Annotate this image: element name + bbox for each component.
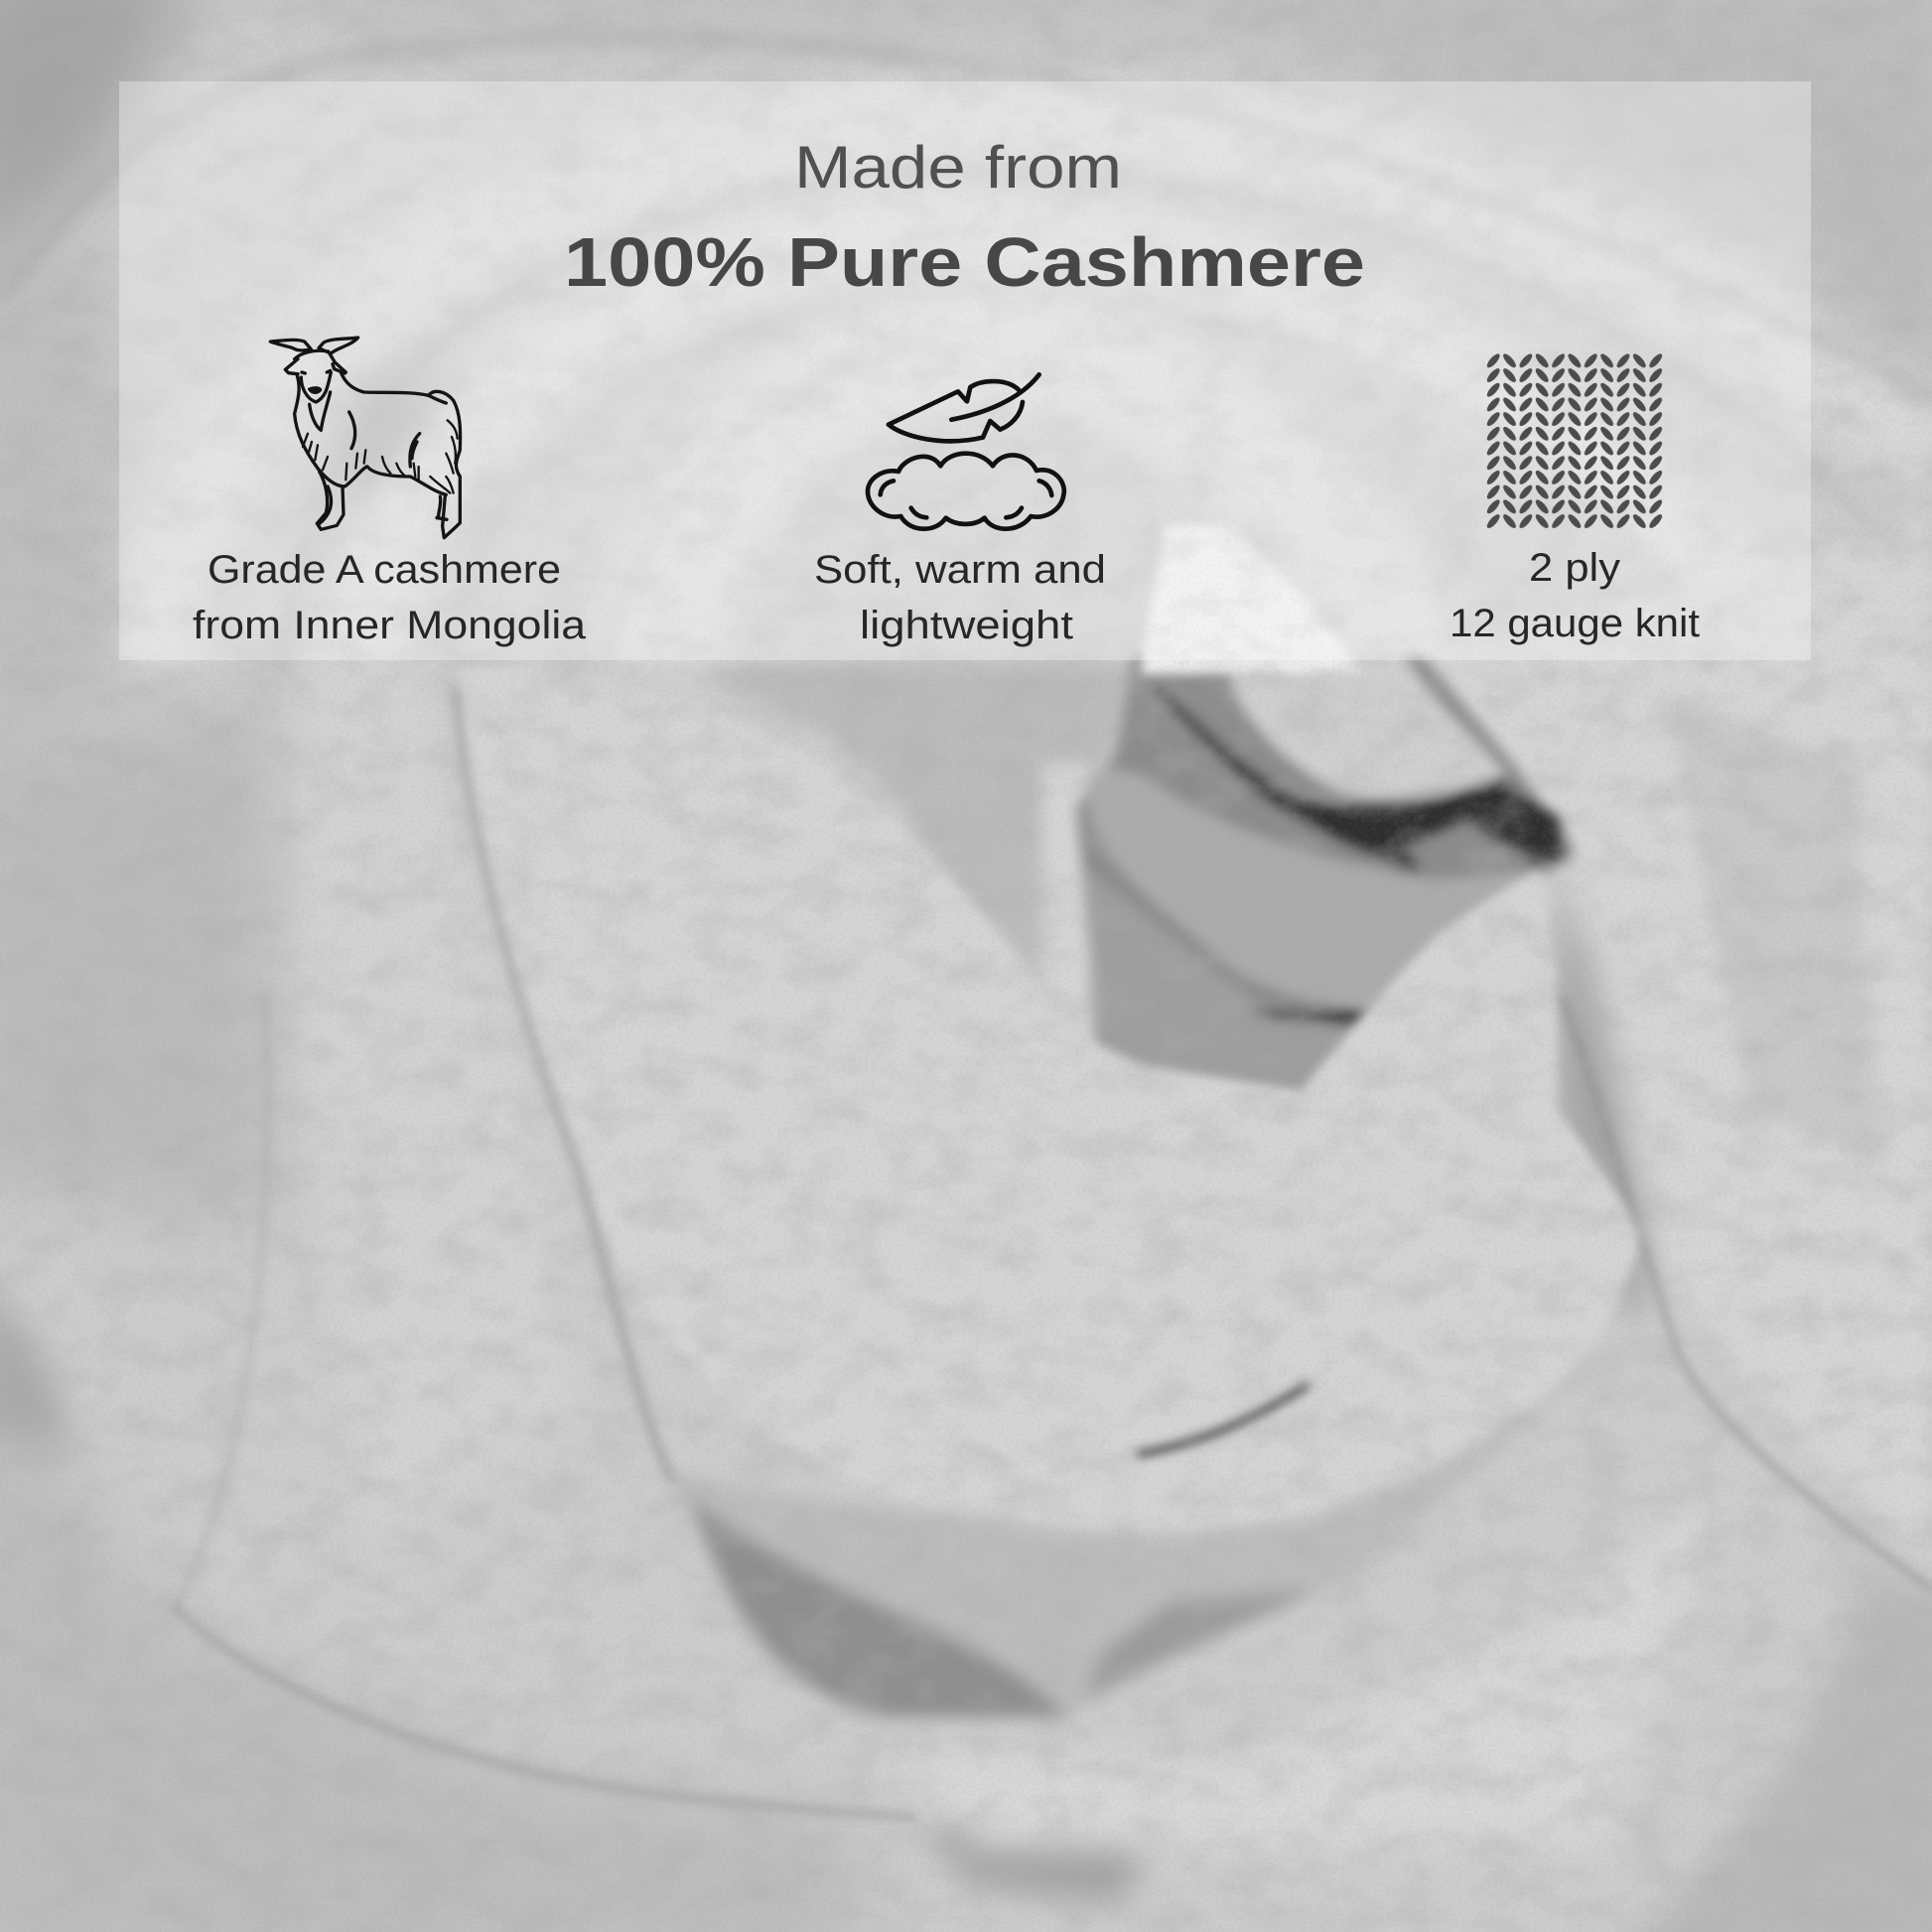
heading line: 100% Pure Cashmere: 100% Pure Cashmere — [564, 223, 1365, 301]
caption: lightweight: lightweight — [860, 604, 1073, 647]
caption: Grade A cashmere: Grade A cashmere — [207, 548, 561, 592]
lower shading — [0, 1269, 1932, 1932]
heading line: Made from: Made from — [794, 134, 1122, 201]
caption: Soft, warm and: Soft, warm and — [814, 548, 1106, 592]
thin crease shadows — [175, 690, 1932, 1818]
right lit fold and gully — [1422, 517, 1932, 1553]
dark centre of the swirl — [1077, 655, 1575, 1092]
translucent white info panel — [119, 81, 1811, 660]
caption: 2 ply: 2 ply — [1529, 546, 1620, 590]
pocket under lobe — [671, 1244, 1645, 1718]
side band, left of central lobe — [296, 665, 579, 1540]
caption: 12 gauge knit: 12 gauge knit — [1449, 602, 1700, 645]
bright pocket inside the fold — [1140, 523, 1361, 675]
fold highlights — [160, 117, 1932, 702]
central lobe — [456, 665, 1645, 1533]
caption: from Inner Mongolia: from Inner Mongolia — [193, 604, 587, 647]
